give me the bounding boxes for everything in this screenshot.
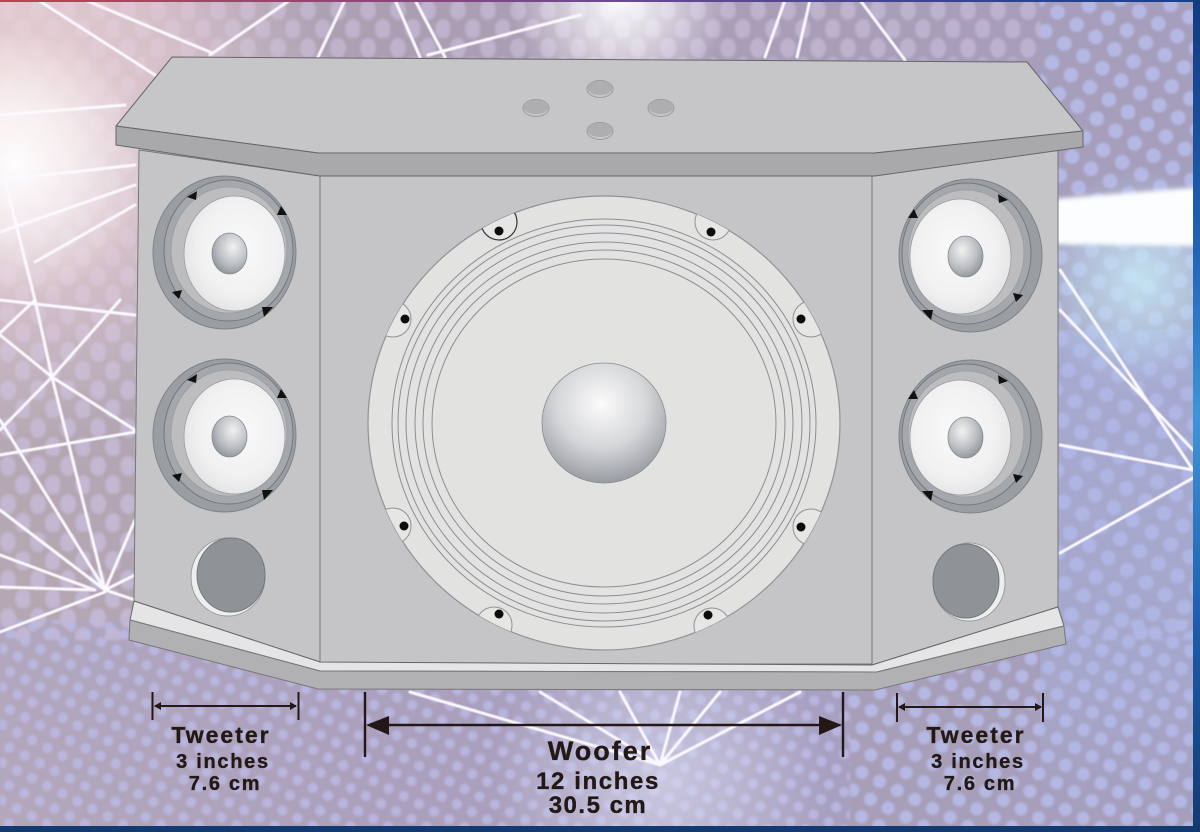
woofer [368,196,840,650]
right lower tweeter [899,360,1042,513]
right tweeter label: 3 inches [931,751,1025,773]
right bass port [933,543,1005,621]
left lower tweeter [153,359,296,512]
right tweeter dimension arrow [897,693,1043,722]
woofer label: Woofer [548,736,652,766]
cabinet right angled panel [872,150,1058,665]
right tweeter label: 7.6 cm [944,773,1016,795]
left upper tweeter [153,176,296,329]
top front fascia [116,126,1083,176]
left tweeter label: Tweeter [171,722,271,748]
speaker cabinet [116,57,1083,690]
woofer dust cap [542,363,666,483]
woofer dimension arrow [365,692,843,757]
left bass port [191,538,265,616]
left tweeter label: 7.6 cm [189,773,261,795]
top buttons [523,80,674,140]
right tweeter label [926,722,1026,795]
base front face [129,620,1066,690]
woofer label: 30.5 cm [549,792,647,819]
left tweeter dimension arrow [152,692,298,720]
woofer label: 12 inches [536,768,660,795]
left tweeter label: 3 inches [176,751,270,773]
base top lip [130,601,1064,672]
left tweeter label [171,722,271,795]
right tweeter label: Tweeter [926,722,1026,748]
woofer label [536,736,660,819]
woofer mounting screws [400,226,806,620]
cabinet left angled panel [134,150,320,662]
woofer basket [368,196,840,650]
right upper tweeter [899,179,1042,332]
woofer surround rings [392,219,816,627]
cabinet center panel [320,176,872,664]
top surface [116,57,1083,153]
woofer mounting tabs [375,204,829,644]
